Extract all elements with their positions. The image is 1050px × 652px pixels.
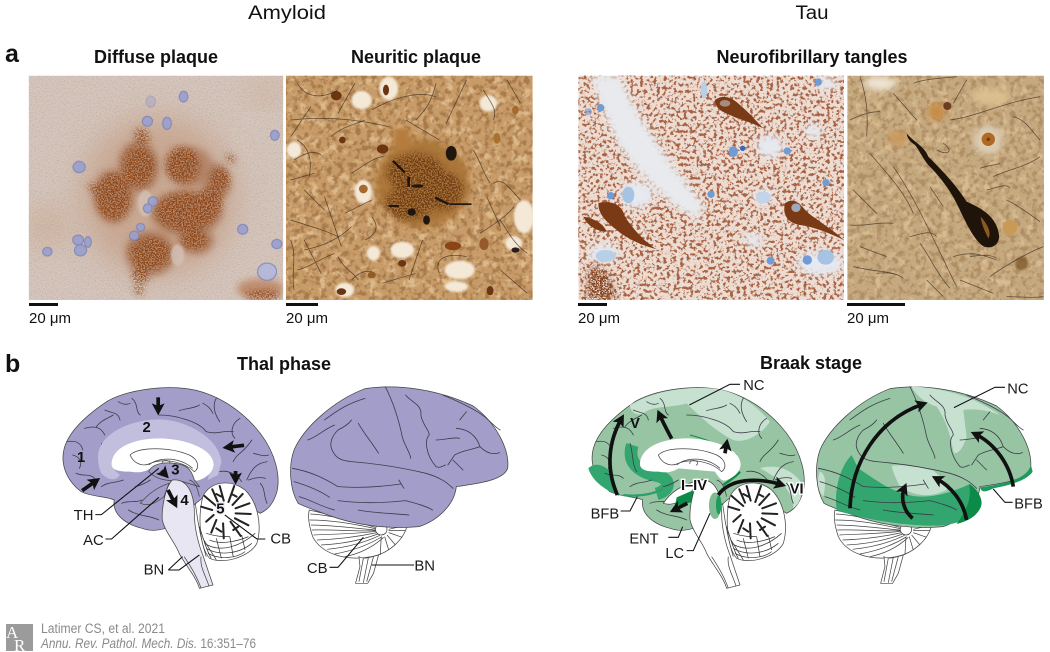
labels and leaders: BFB <box>591 506 619 522</box>
pale vacuoles <box>287 77 534 297</box>
labels and leaders: CB <box>307 561 328 577</box>
brain: lateral view, green <box>816 387 1033 583</box>
phase numbers <box>77 420 225 518</box>
panel: neurofibrillary tangle (silver stain) micrograph <box>847 76 1044 300</box>
labels and leaders: TH <box>74 508 93 524</box>
panel: neuritic plaque micrograph <box>286 76 534 300</box>
labels and leaders: CB <box>270 532 291 548</box>
scale bar: tangles right <box>847 303 905 327</box>
citation: Annu. Rev. Pathol. Mech. Dis. 16:351–76 <box>40 636 256 651</box>
tangle-bearing neurons <box>583 97 844 249</box>
labels and leaders <box>591 378 1043 562</box>
spread arrows <box>610 414 782 510</box>
labels and leaders: AC <box>83 533 104 549</box>
labels and leaders: BN <box>414 558 435 574</box>
phase numbers: 5 <box>216 502 225 518</box>
labels and leaders <box>74 468 435 579</box>
scale bar: neuritic plaque: 20 μm <box>286 310 328 327</box>
plaque core <box>375 140 470 227</box>
stage labels: V <box>630 416 640 432</box>
labels and leaders: ENT <box>629 532 659 548</box>
plaque deposit <box>88 129 281 300</box>
heading: Neuritic plaque: Neuritic plaque <box>351 47 481 67</box>
phase numbers: 4 <box>180 493 189 509</box>
logo: Annual Reviews: A <box>6 623 19 642</box>
plaque halo <box>93 140 230 277</box>
stage labels <box>630 416 804 497</box>
brain: medial view, green <box>588 388 804 588</box>
column heading: Amyloid: Amyloid <box>248 3 326 24</box>
labels and leaders: NC <box>1007 381 1029 397</box>
blue cell nuclei <box>43 91 282 280</box>
heading: Diffuse plaque: Diffuse plaque <box>94 47 218 67</box>
phase numbers: 2 <box>143 420 151 436</box>
pale vessel <box>590 76 703 220</box>
labels and leaders: BN <box>144 563 164 579</box>
heading: Neurofibrillary tangles: Neurofibrillary tangles <box>716 47 908 67</box>
labels and leaders: LC <box>665 546 684 562</box>
panel: Braak stage brains <box>588 378 1043 588</box>
panel: Thal phase brains <box>63 387 508 588</box>
brain: medial view, purple <box>63 388 278 588</box>
labels and leaders: NC <box>743 378 765 394</box>
stage labels: VI <box>790 481 804 497</box>
scale bar: diffuse plaque: 20 μm <box>29 310 71 327</box>
dark nuclei <box>331 85 520 295</box>
black dystrophic neurites <box>389 146 472 225</box>
citation: Latimer CS, et al. 2021 <box>41 621 165 636</box>
tangle neuron <box>907 133 999 247</box>
fibres <box>291 80 527 293</box>
brain: lateral view, purple <box>291 387 508 583</box>
blue nuclei <box>585 78 834 265</box>
heading: Braak stage: Braak stage <box>760 353 862 373</box>
panel letter a: a <box>5 40 20 68</box>
panel: diffuse plaque micrograph <box>29 76 284 300</box>
scale bar: tangles left: 20 μm <box>578 310 620 327</box>
panel letter b: b <box>5 350 20 378</box>
fibres <box>850 77 1043 297</box>
citation <box>40 621 256 651</box>
labels and leaders: BFB <box>1014 496 1043 512</box>
phase numbers: 1 <box>77 450 85 466</box>
heading: Thal phase: Thal phase <box>237 354 331 374</box>
stage labels: I–IV <box>681 478 707 494</box>
panel: neurofibrillary tangles (immunostain) micrograph <box>578 76 844 300</box>
scale bar: tangles right: 20 μm <box>847 310 889 327</box>
column heading: Tau: Tau <box>796 3 828 24</box>
pale gaps <box>138 190 184 266</box>
logo: Annual Reviews <box>6 623 33 652</box>
spread arrows, lateral <box>850 404 1013 520</box>
phase numbers: 3 <box>171 462 180 478</box>
progression arrows <box>82 397 244 504</box>
